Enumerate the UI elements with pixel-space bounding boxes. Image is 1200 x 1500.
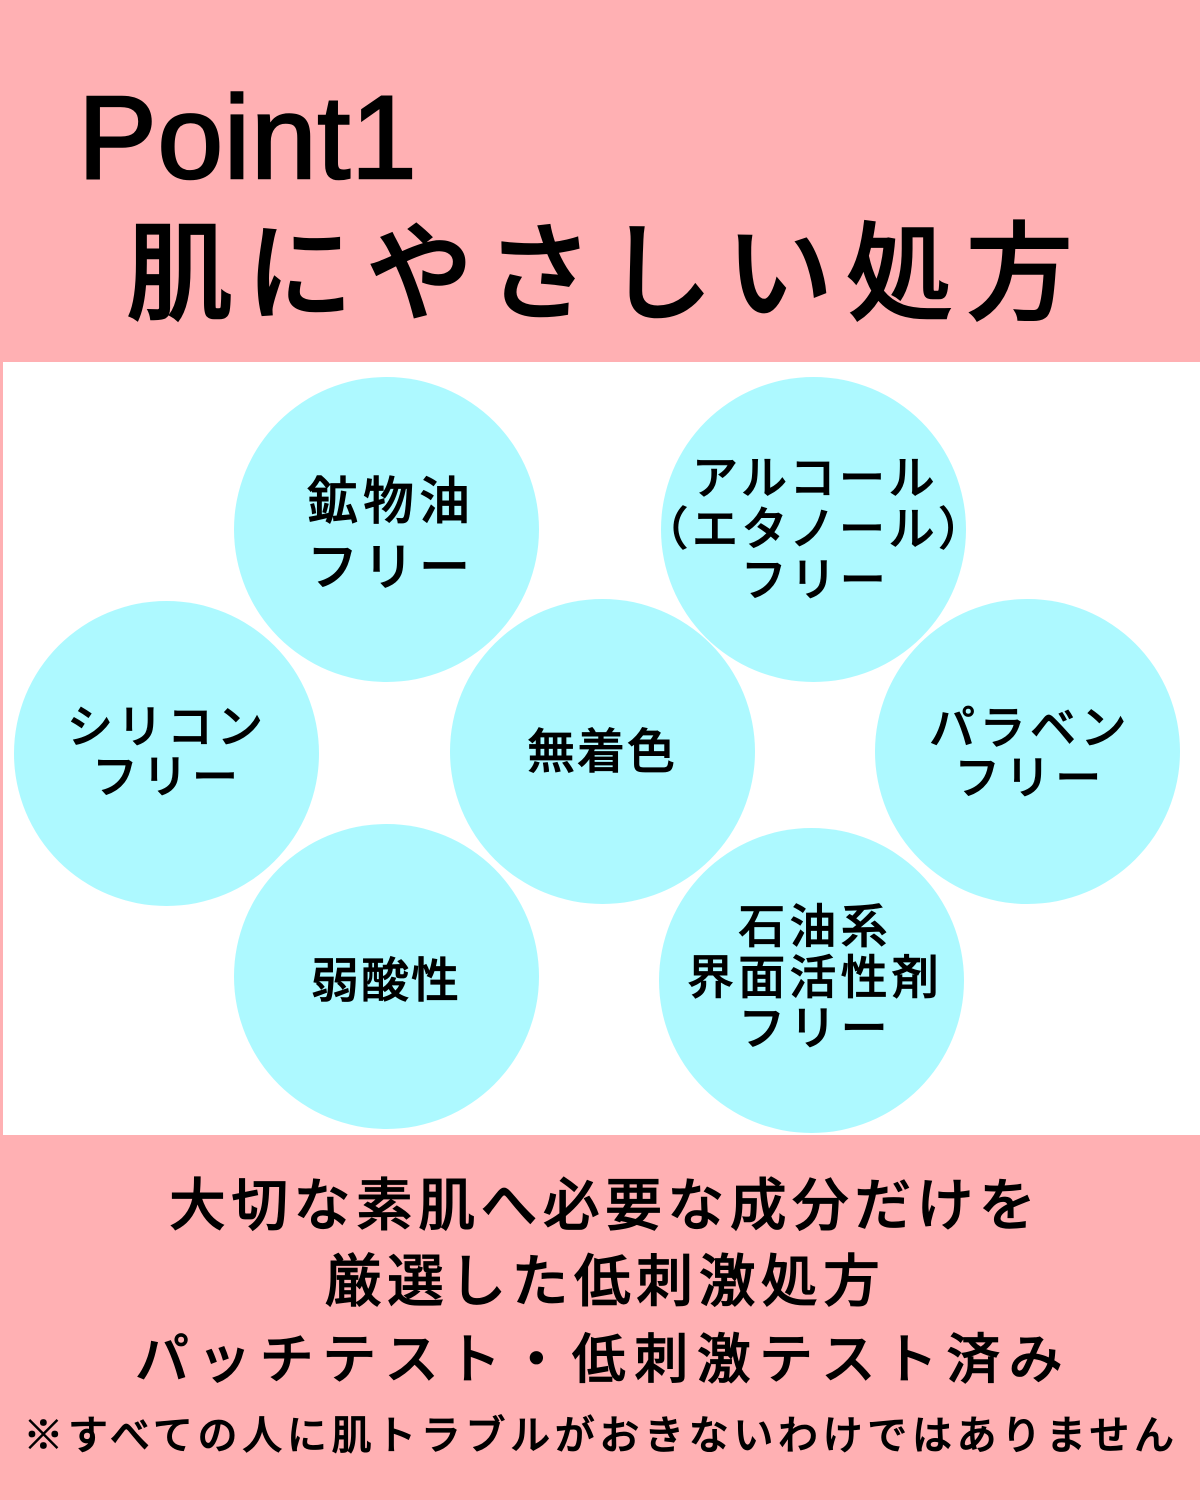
circle: alcohol free: フリー [741,554,889,606]
circle: colorant free [450,599,755,904]
circle: petroleum surfactant free: 界面活性剤 [687,951,943,1004]
circle: silicone free [14,601,319,906]
circle: alcohol free [661,377,966,682]
circle: weakly acidic: 弱酸性 [311,955,461,1008]
circle: petroleum surfactant free: フリー [738,1002,892,1055]
text: description line 3: パッチテスト・低刺激テスト済み [135,1330,1071,1390]
circle: paraben free: パラベン [929,702,1131,754]
circle: paraben free [875,599,1180,904]
circle: silicone free: フリー [92,751,242,803]
circle: alcohol free: （エタノール） [642,503,988,555]
title: Point1: Point1 [78,72,417,204]
circle: mineral oil free [234,377,539,682]
circle: petroleum surfactant free: 石油系 [738,900,892,953]
text: disclaimer: ※すべての人に肌トラブルがおきないわけではありません [23,1414,1179,1458]
circle: petroleum surfactant free [659,828,964,1133]
panel: ingredient circles [3,362,1200,1135]
text: description line 2: 厳選した低刺激処方 [325,1250,885,1314]
circle: colorant free: 無着色 [527,726,677,779]
title: subtitle: 肌にやさしい処方 [126,214,1086,334]
text: description line 1: 大切な素肌へ必要な成分だけを [169,1174,1041,1238]
circle: paraben free: フリー [954,752,1106,804]
circle: mineral oil free: フリー [307,539,475,596]
circle: alcohol free: アルコール [692,452,938,504]
circle: weakly acidic [234,824,539,1129]
circle: mineral oil free: 鉱物油 [307,473,475,530]
circle: silicone free: シリコン [67,701,267,753]
